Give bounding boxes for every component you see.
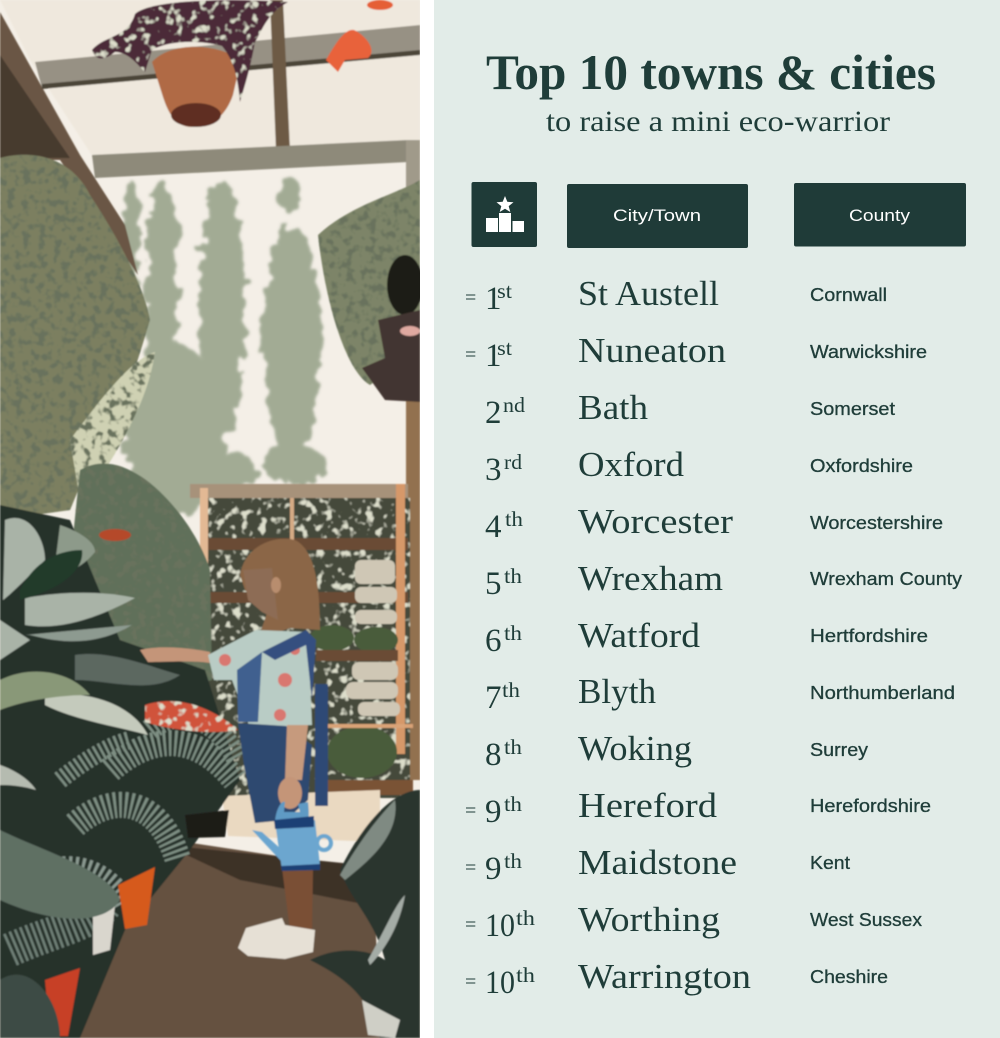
- row: 7th Blyth: th: [502, 678, 521, 702]
- right post: [405, 139, 420, 188]
- row: 3rd Oxford: 3: [485, 452, 502, 488]
- row: =9th Maidstone: th: [504, 849, 523, 873]
- row: =10th Worthing: West Sussex: [810, 910, 922, 930]
- row: 2nd Bath: [485, 388, 895, 431]
- row: 2nd Bath: nd: [503, 393, 526, 417]
- column header: County: County: [849, 206, 911, 225]
- row: 4th Worcester: th: [505, 507, 524, 531]
- row: =9th Maidstone: =: [465, 857, 476, 879]
- arm: [140, 647, 210, 663]
- row: =10th Worthing: th: [516, 906, 536, 930]
- row: =10th Worthing: 10: [485, 908, 515, 944]
- row: 5th Wrexham: 5: [485, 566, 502, 602]
- row: 3rd Oxford: rd: [504, 450, 523, 474]
- row: 6th Watford: [485, 616, 928, 659]
- row: =10th Warrington: [465, 957, 888, 1001]
- hand: [278, 777, 302, 809]
- dark leaf: [20, 550, 82, 600]
- row: =9th Hereford: [465, 786, 931, 830]
- row: 6th Watford: 6: [485, 623, 502, 659]
- row: =1st St Austell: St Austell: [578, 274, 719, 313]
- plant mass, lower left: [0, 505, 240, 1038]
- lower beam: [92, 140, 408, 178]
- distant trees: [122, 177, 327, 515]
- row: =9th Hereford: 9: [485, 794, 502, 830]
- lower arm: [285, 725, 308, 780]
- row: =1st St Austell: =: [465, 287, 476, 309]
- row: 2nd Bath: Somerset: [810, 399, 895, 419]
- dungaree shorts: [238, 723, 312, 823]
- photo: girl watering plants in a greenhouse: [0, 0, 423, 1038]
- row: 3rd Oxford: [485, 445, 913, 488]
- row: 5th Wrexham: [485, 559, 962, 602]
- pale posts: [199, 487, 210, 564]
- row: =1st St Austell: [465, 274, 887, 317]
- watering can: [275, 802, 309, 822]
- upper beam: [35, 25, 420, 88]
- shirt: [208, 630, 312, 728]
- right foreground plant: [310, 790, 420, 1038]
- row: 8th Woking: Surrey: [810, 740, 868, 760]
- row: =1st Nuneaton: [465, 331, 927, 374]
- panel: ranking table: [434, 0, 1000, 1038]
- row: =9th Maidstone: Kent: [810, 853, 850, 873]
- row: =9th Hereford: Hereford: [578, 786, 718, 825]
- orange pot: [118, 867, 155, 929]
- row: 7th Blyth: [485, 672, 955, 716]
- foreground leaves, lower left: [0, 830, 120, 1038]
- row: =1st St Austell: Cornwall: [810, 285, 887, 305]
- big variegated leaves: [0, 518, 180, 790]
- row: =10th Warrington: th: [516, 963, 536, 987]
- vertical rafter: [270, 0, 290, 150]
- row: =1st Nuneaton: Warwickshire: [810, 342, 927, 362]
- hanging strap: [315, 684, 328, 806]
- row: =9th Maidstone: 9: [485, 851, 502, 887]
- row: =10th Warrington: 10: [485, 965, 515, 1001]
- pale striped foliage: [70, 352, 155, 500]
- row: 8th Woking: [485, 729, 868, 773]
- column header: County: [794, 183, 966, 246]
- row: 7th Blyth: 7: [485, 680, 502, 716]
- row: 5th Wrexham: Wrexham: [578, 559, 723, 598]
- red flowers: [145, 701, 238, 732]
- sacks: [346, 560, 400, 716]
- face: [243, 568, 278, 620]
- shelf unit: [205, 498, 410, 798]
- black planter: [185, 810, 229, 838]
- subtitle: to raise a mini eco-warrior: [546, 105, 890, 138]
- row: 7th Blyth: Blyth: [578, 672, 656, 711]
- row: 6th Watford: Watford: [578, 616, 701, 655]
- row: =9th Hereford: th: [504, 792, 523, 816]
- orange flowers: [326, 30, 372, 72]
- hanging plant, left: [0, 155, 150, 520]
- row: 6th Watford: th: [504, 621, 523, 645]
- row: =10th Worthing: Worthing: [578, 900, 720, 939]
- roof panels: [0, 0, 420, 160]
- hanging pot foliage: [92, 0, 288, 102]
- row: 8th Woking: 8: [485, 737, 502, 773]
- row: =10th Warrington: Warrington: [578, 957, 751, 996]
- girl: [140, 539, 331, 959]
- row: =9th Maidstone: [465, 843, 850, 887]
- row: =9th Maidstone: Maidstone: [578, 843, 737, 882]
- row: 4th Worcester: 4: [485, 509, 502, 545]
- row: =1st Nuneaton: =: [465, 344, 476, 366]
- hanging pot: [152, 47, 241, 127]
- row: 3rd Oxford: Oxfordshire: [810, 456, 913, 476]
- row: 8th Woking: th: [504, 735, 523, 759]
- dungaree bib and straps: [237, 652, 262, 722]
- row: 8th Woking: Woking: [578, 729, 692, 768]
- title: Top 10 towns & cities: [486, 44, 936, 100]
- row: 2nd Bath: Bath: [578, 388, 649, 427]
- fern fronds: [10, 717, 238, 950]
- row: =10th Warrington: Cheshire: [810, 967, 888, 987]
- row: =1st Nuneaton: Nuneaton: [578, 331, 726, 370]
- floor boards: [222, 790, 380, 842]
- row: 7th Blyth: Northumberland: [810, 683, 955, 703]
- row: 6th Watford: Hertfordshire: [810, 626, 928, 646]
- row: =10th Worthing: =: [465, 914, 476, 936]
- column header: City/Town: [567, 184, 748, 248]
- path: [68, 842, 382, 1038]
- right stacked pots: [362, 310, 420, 402]
- left roof frame: [0, 12, 138, 275]
- red pot: [45, 968, 80, 1036]
- row: 3rd Oxford: Oxford: [578, 445, 685, 484]
- back hair: [240, 539, 320, 640]
- row: 4th Worcester: Worcester: [578, 502, 733, 541]
- row: 4th Worcester: Worcestershire: [810, 513, 943, 533]
- icon: podium with star: [472, 182, 537, 247]
- row: =1st St Austell: st: [497, 279, 512, 303]
- white pot: [93, 905, 115, 955]
- row: =10th Worthing: [465, 900, 922, 944]
- row: 5th Wrexham: th: [504, 564, 523, 588]
- mid-ground plants: [72, 462, 212, 682]
- row: 2nd Bath: 2: [485, 395, 502, 431]
- row: 4th Worcester: [485, 502, 943, 545]
- row: =1st St Austell: 1: [485, 281, 502, 317]
- row: =9th Hereford: =: [465, 800, 476, 822]
- right hanging plant: [318, 180, 420, 385]
- legs: [282, 868, 313, 930]
- shelf greenery: [310, 625, 398, 778]
- row: 5th Wrexham: Wrexham County: [810, 569, 962, 589]
- row: =9th Hereford: Herefordshire: [810, 796, 931, 816]
- column header: City/Town: City/Town: [613, 206, 701, 225]
- row: =10th Warrington: =: [465, 971, 476, 993]
- shoes: [238, 918, 315, 959]
- row: =1st Nuneaton: 1: [485, 338, 502, 374]
- row: =1st Nuneaton: st: [497, 336, 512, 360]
